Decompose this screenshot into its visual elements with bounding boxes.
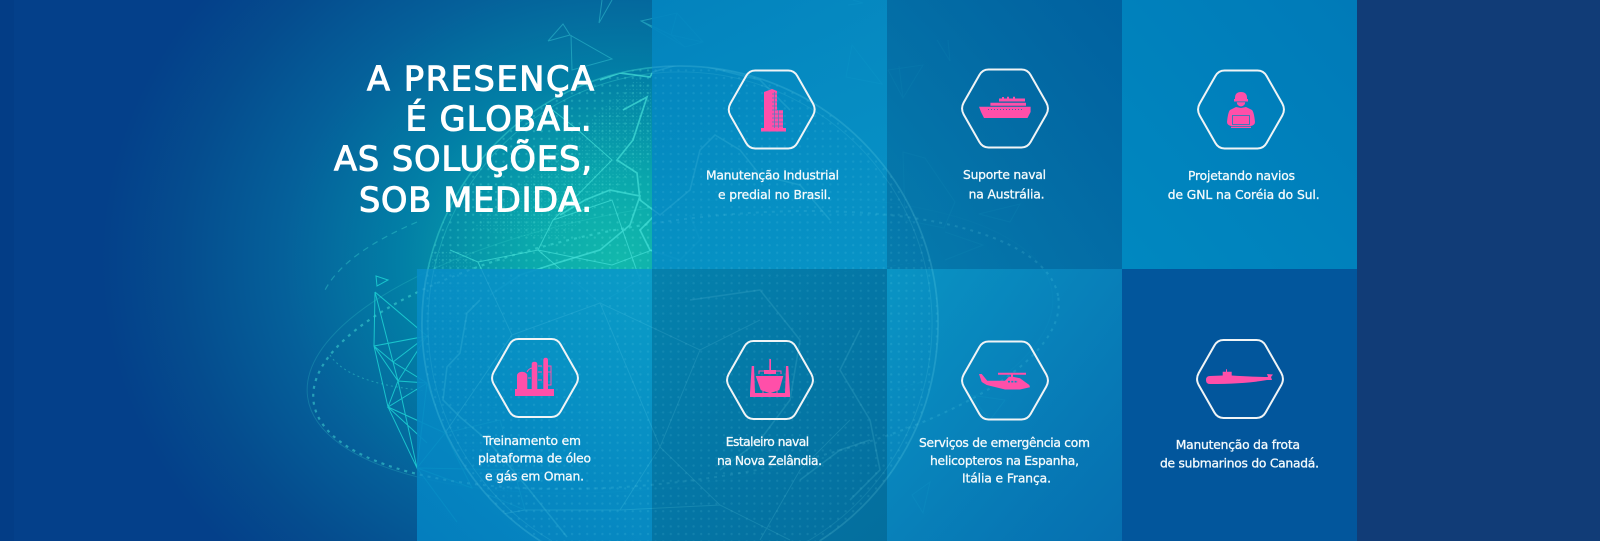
caption <box>963 168 1046 201</box>
hexagon frame <box>492 339 578 417</box>
caption: Treinamento em <box>482 434 581 448</box>
title <box>334 60 594 220</box>
caption: Projetando navios <box>1188 169 1295 183</box>
caption: Manutenção Industrial <box>706 168 839 182</box>
wireframe network left <box>374 276 525 522</box>
caption <box>478 434 591 484</box>
icon: ship <box>979 97 1031 118</box>
title: É GLOBAL. <box>406 99 592 139</box>
panel: manutenção submarinos <box>1160 340 1319 471</box>
hexagon frame <box>962 342 1048 420</box>
caption <box>1160 438 1319 471</box>
globe wireframe map <box>427 66 870 534</box>
hexagon frame <box>962 70 1048 148</box>
caption <box>919 436 1090 486</box>
hexagon frame <box>1198 70 1284 148</box>
icon: helicopter <box>979 373 1030 390</box>
caption: de submarinos do Canadá. <box>1160 457 1319 471</box>
hexagon frame <box>729 70 815 148</box>
grid cell backgrounds <box>417 0 1357 541</box>
hexagon frame <box>1197 340 1283 418</box>
panel: projetando navios <box>1168 70 1320 202</box>
panel: manutenção industrial <box>706 70 839 202</box>
caption: na Austrália. <box>969 187 1045 201</box>
network fragments top <box>548 0 1020 513</box>
caption: na Nova Zelândia. <box>717 454 822 468</box>
orbit rings <box>288 154 1076 536</box>
caption: Itália e França. <box>962 472 1051 486</box>
title: A PRESENÇA <box>367 60 594 99</box>
caption: e predial no Brasil. <box>718 188 831 202</box>
icon: refinery <box>515 358 554 396</box>
caption: e gás em Oman. <box>485 470 584 484</box>
caption: helicopteros na Espanha, <box>930 454 1079 468</box>
panel: suporte naval <box>962 70 1048 201</box>
caption: de GNL na Coréia do Sul. <box>1168 188 1320 202</box>
panel: treinamento plataforma <box>478 339 591 484</box>
hexagon frame <box>727 341 813 419</box>
icon: submarine <box>1206 369 1273 384</box>
title: SOB MEDIDA. <box>359 181 592 220</box>
panel: serviços de emergência <box>919 342 1090 486</box>
title: AS SOLUÇÕES, <box>334 139 592 179</box>
caption: Serviços de emergência com <box>919 436 1090 450</box>
caption <box>717 435 822 468</box>
caption: Suporte naval <box>963 168 1046 182</box>
icon: drydock <box>750 359 790 397</box>
panel: estaleiro naval <box>717 341 822 468</box>
caption: Estaleiro naval <box>726 435 809 449</box>
icon: building <box>761 89 786 132</box>
globe overlay on cells <box>417 65 1060 541</box>
icon: engineer <box>1227 92 1255 128</box>
caption <box>706 168 839 202</box>
caption: Manutenção da frota <box>1176 438 1300 452</box>
caption: plataforma de óleo <box>478 452 591 466</box>
caption <box>1168 169 1320 202</box>
